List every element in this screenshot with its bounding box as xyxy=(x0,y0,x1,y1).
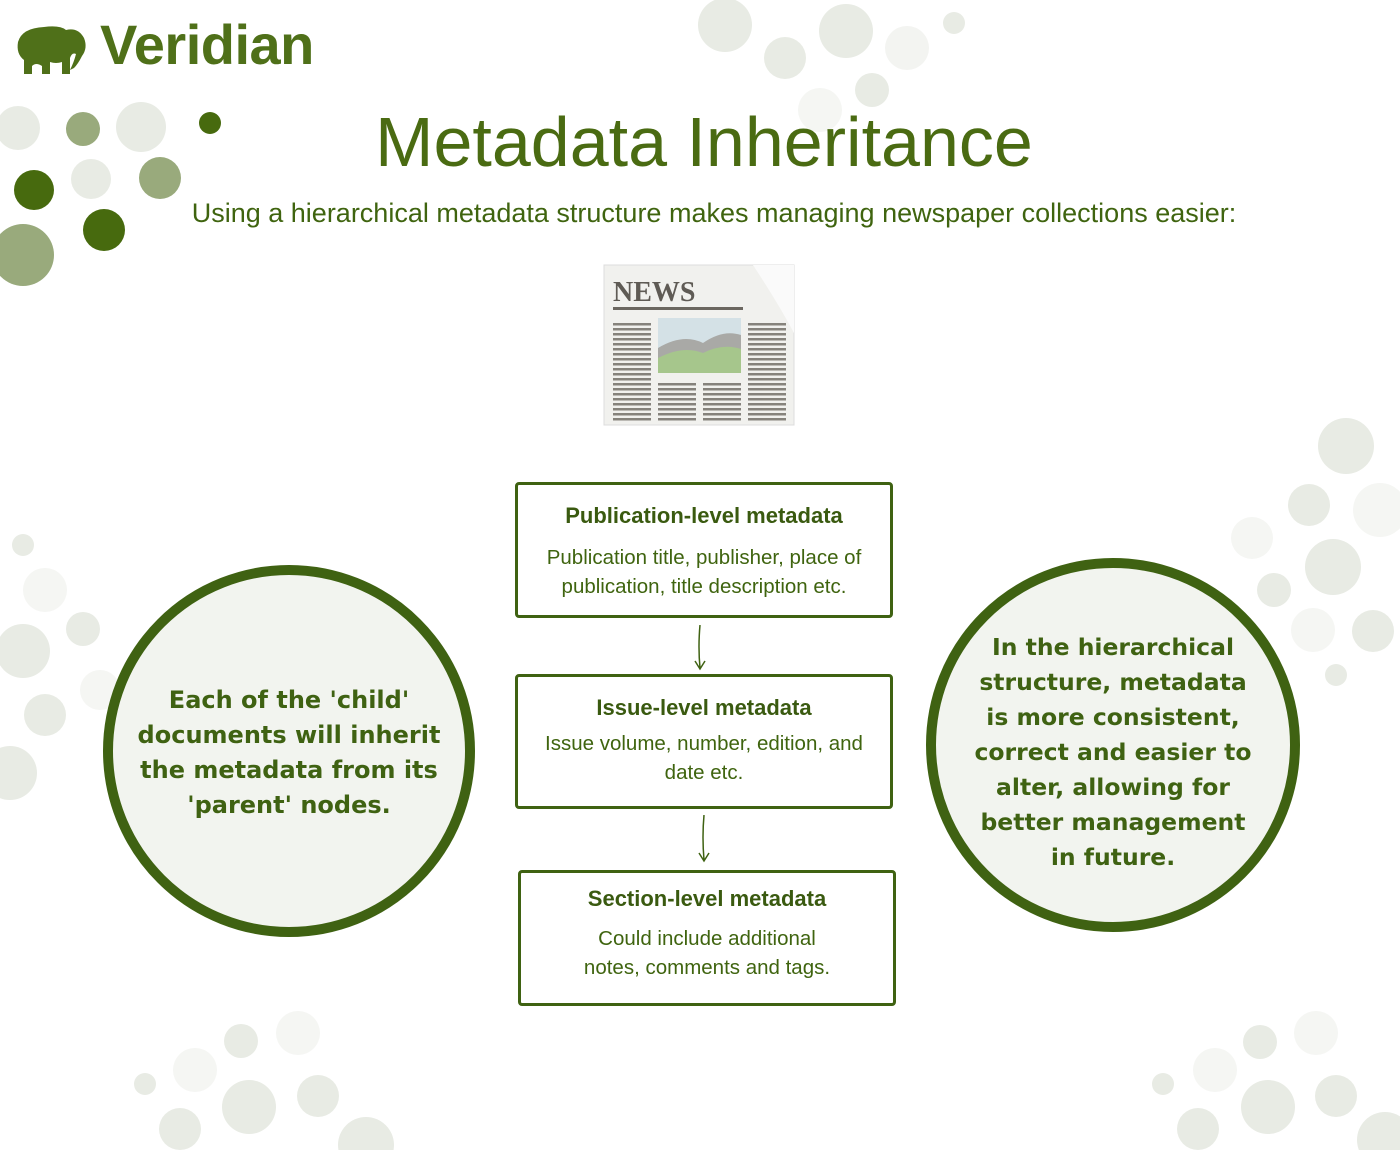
box: section-level xyxy=(518,870,896,1006)
circle: right callout: alter, allowing for xyxy=(996,772,1230,800)
circle: left callout: 'parent' nodes. xyxy=(187,791,391,819)
circle: left callout: documents will inherit xyxy=(138,721,440,749)
box: issue-level xyxy=(515,674,893,809)
box: section-level: Could include additional xyxy=(598,927,816,950)
arrow: publication to issue xyxy=(694,625,706,670)
box: publication-level xyxy=(515,482,893,618)
title: Metadata Inheritance xyxy=(375,103,1033,181)
subtitle: Using a hierarchical metadata structure makes managing newspaper collections easier: xyxy=(192,198,1236,228)
circle: right callout: In the hierarchical xyxy=(992,632,1234,660)
box: publication-level: publication, title description etc. xyxy=(562,575,846,598)
icon: elephant xyxy=(18,26,86,74)
box: section-level: Section-level metadata xyxy=(588,886,826,911)
box: issue-level: Issue-level metadata xyxy=(596,695,812,720)
circle: right callout: is more consistent, xyxy=(986,702,1240,730)
circle: right callout: correct and easier to xyxy=(974,738,1252,766)
circle: right callout: better management xyxy=(980,808,1246,836)
circle: left callout: Each of the 'child' xyxy=(169,686,409,714)
box: issue-level: Issue volume, number, edition, and xyxy=(545,732,863,755)
circle: right callout: in future. xyxy=(1051,842,1175,870)
circle: right callout xyxy=(926,558,1300,932)
circle: left callout: the metadata from its xyxy=(140,756,438,784)
circle: right callout: structure, metadata xyxy=(979,668,1247,696)
box: issue-level: date etc. xyxy=(665,761,743,784)
circle: left callout xyxy=(103,565,475,937)
arrow: issue to section xyxy=(698,815,710,862)
icon: newspaper: NEWS xyxy=(613,277,695,308)
box: section-level: notes, comments and tags. xyxy=(584,956,830,979)
box: publication-level: Publication-level metadata xyxy=(565,503,843,528)
box: publication-level: Publication title, publisher, place of xyxy=(547,546,861,569)
icon: newspaper xyxy=(604,264,794,426)
logo: Veridian xyxy=(100,13,314,76)
